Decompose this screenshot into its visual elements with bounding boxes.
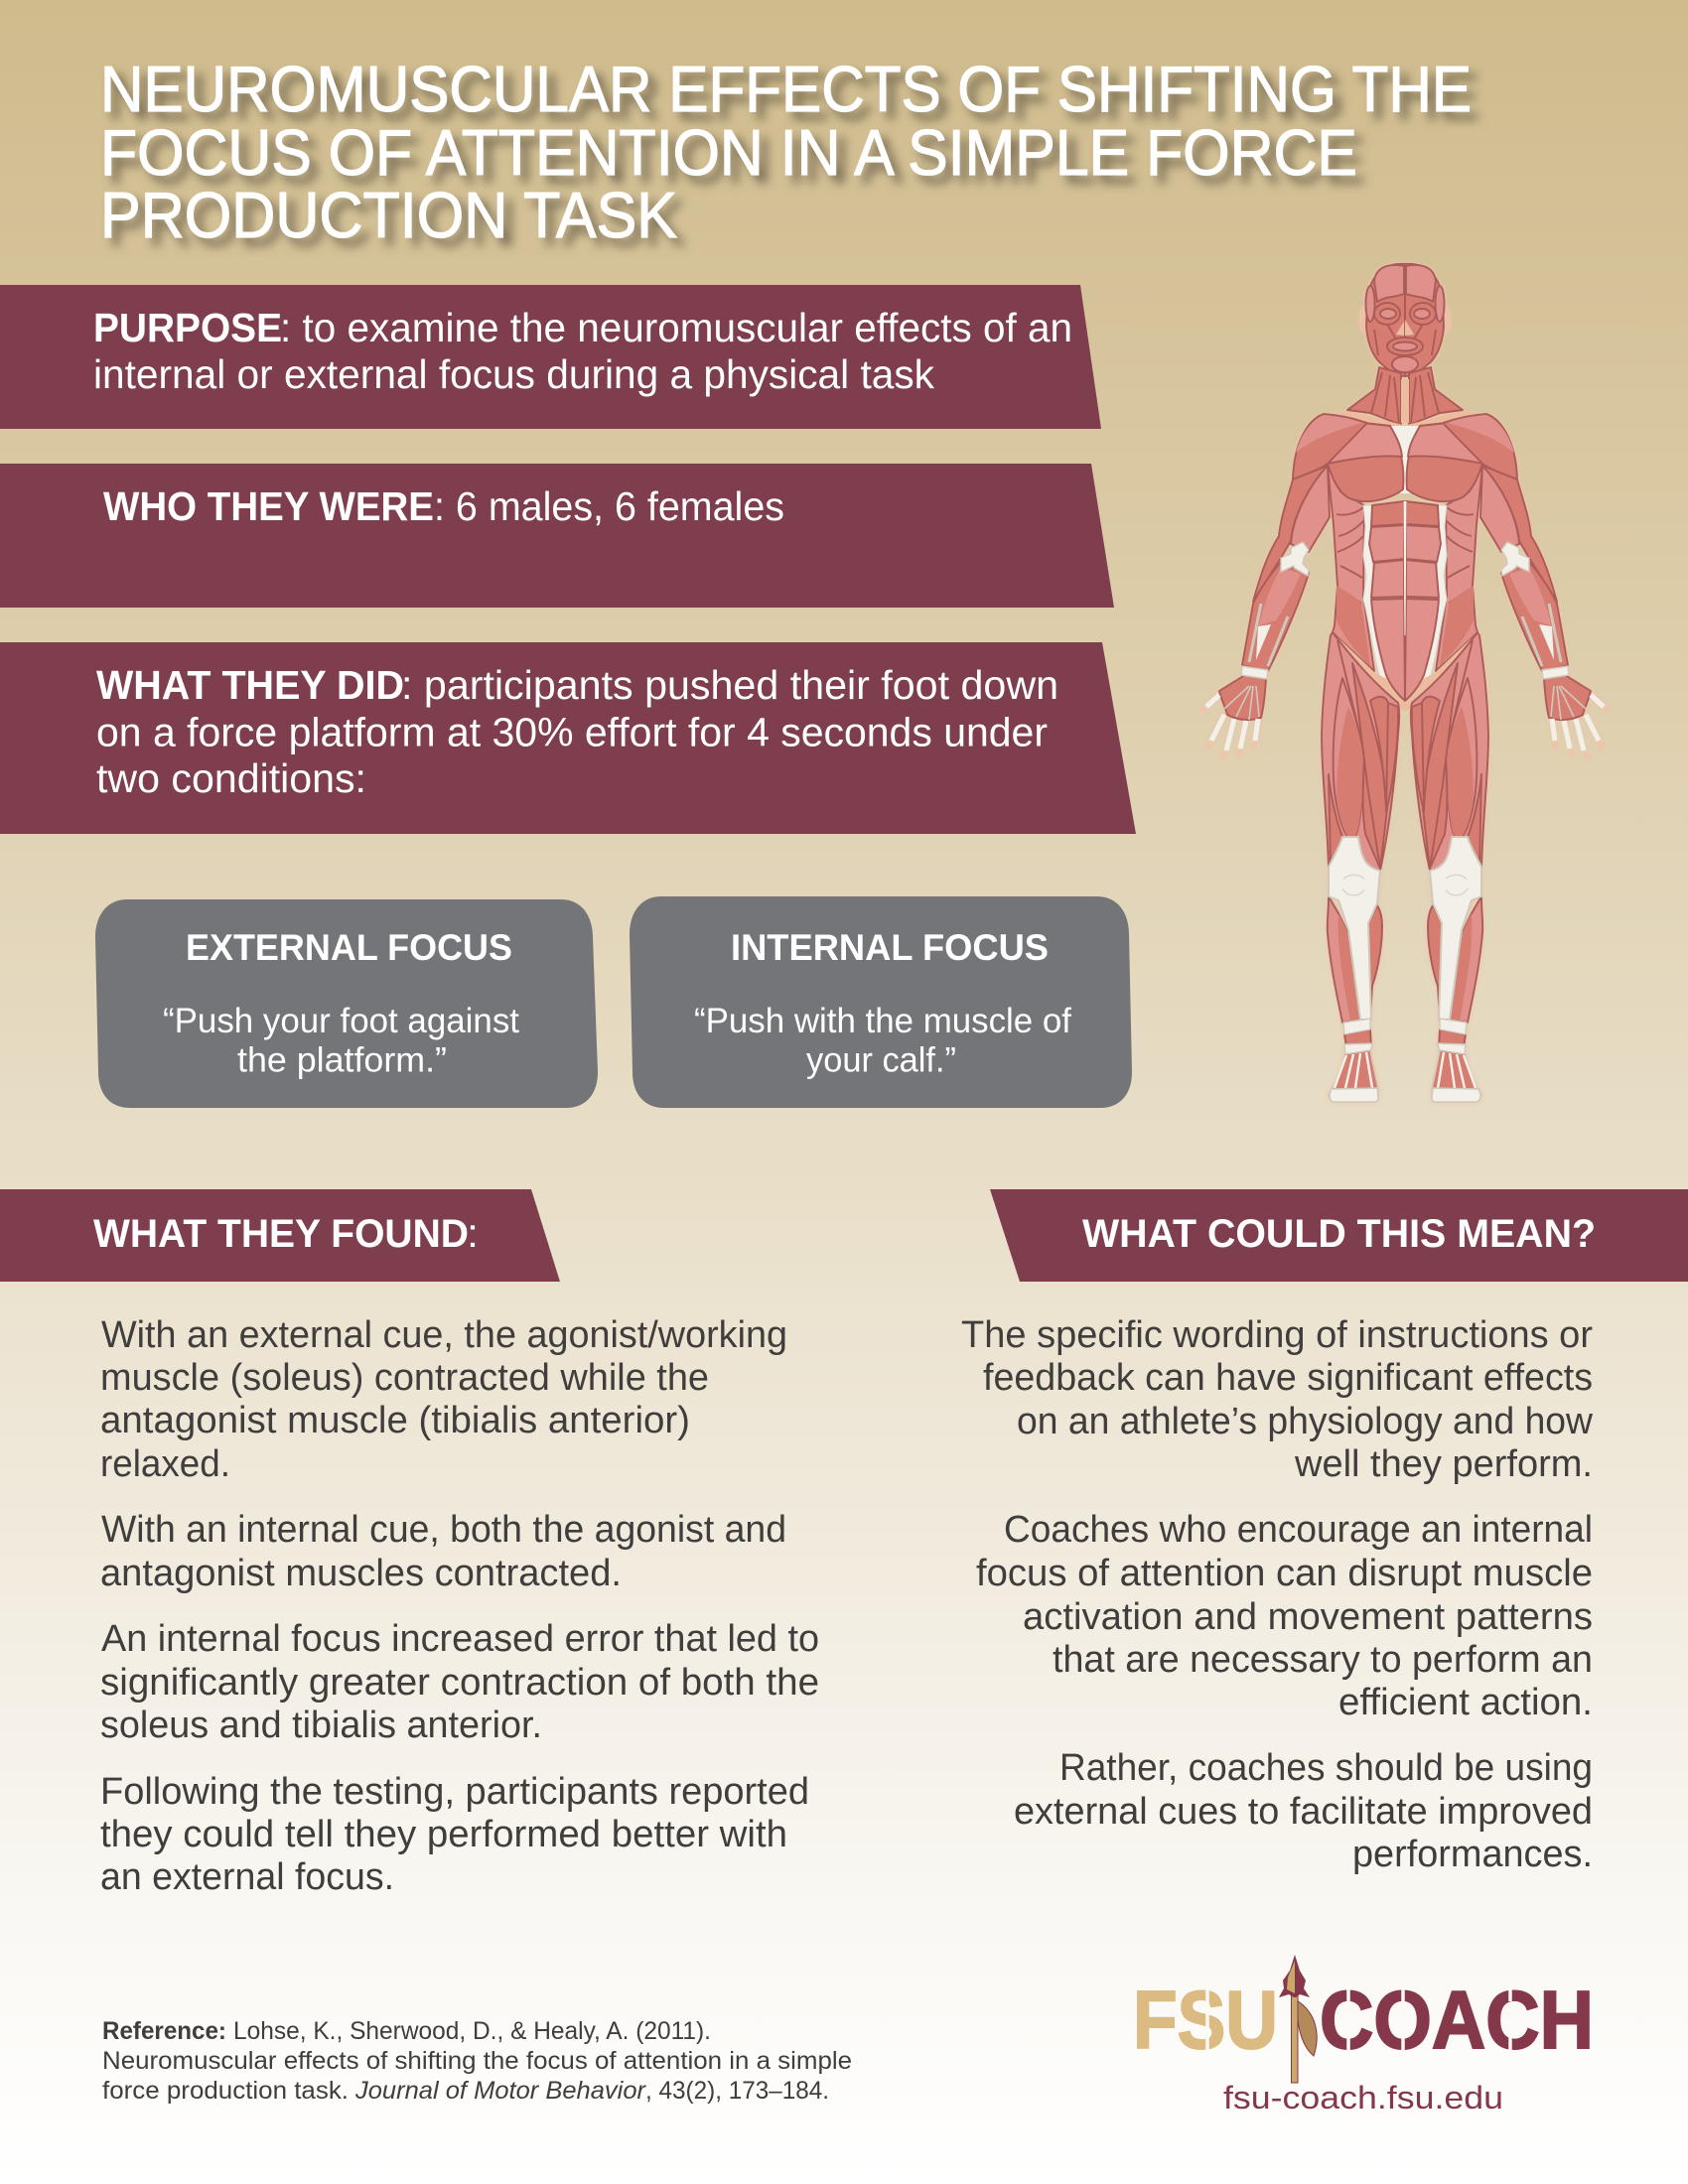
reference citation: Lohse, K., Sherwood, D., & Healy, A. (2011). <box>233 2017 711 2045</box>
text block: findings: an external focus. <box>100 1856 394 1898</box>
muscular body illustration <box>1202 264 1608 1102</box>
panel: purpose: PURPOSE <box>93 305 282 350</box>
text block: findings <box>100 1314 819 1898</box>
panel: who they were: : 6 males, 6 females <box>434 483 784 529</box>
title <box>100 53 1472 251</box>
panel: what they did: WHAT THEY DID <box>96 662 404 708</box>
icon: spear <box>1279 1955 1317 2083</box>
reference citation <box>102 2017 852 2105</box>
title: FOCUS OF ATTENTION IN A SIMPLE FORCE <box>100 116 1357 189</box>
text block: implications: Coaches who encourage an internal <box>1004 1509 1593 1551</box>
text block: findings: muscle (soleus) contracted while the <box>100 1357 709 1399</box>
text block: findings: soleus and tibialis anterior. <box>100 1705 542 1746</box>
panel: purpose: internal or external focus during a physical task <box>93 351 934 397</box>
heading: what they found: : <box>467 1210 479 1256</box>
panel: internal focus: “Push with the muscle of <box>694 1002 1071 1040</box>
reference citation: force production task. <box>102 2077 349 2105</box>
heading: what could this mean <box>990 1189 1688 1282</box>
panel: who they were: WHO THEY WERE <box>103 483 434 529</box>
panel: purpose <box>0 285 1101 429</box>
panel: internal focus <box>630 896 1132 1108</box>
panel: what they did <box>0 642 1136 834</box>
reference citation: Reference: <box>102 2017 226 2045</box>
text block: findings: antagonist muscles contracted. <box>100 1553 622 1594</box>
text block: findings: they could tell they performed better with <box>100 1814 787 1855</box>
panel: purpose: : to examine the neuromuscular effects of an <box>280 305 1072 350</box>
text block: implications: focus of attention can disrupt muscle <box>976 1553 1593 1594</box>
panel: external focus: “Push your foot against <box>163 1002 519 1040</box>
panel: external focus: the platform.” <box>237 1040 447 1080</box>
logo: FSU COACH: FSU <box>1133 1974 1278 2066</box>
text block: findings: With an external cue, the agonist/working <box>101 1314 787 1356</box>
text block: implications: activation and movement patterns <box>1023 1596 1593 1638</box>
panel: what they did: two conditions: <box>96 755 366 801</box>
panel: who they were <box>0 464 1114 608</box>
text block: implications: that are necessary to perform an <box>1053 1639 1593 1681</box>
title: PRODUCTION TASK <box>100 179 677 251</box>
reference citation: , 43(2), 173–184. <box>645 2077 829 2105</box>
heading: what they found <box>0 1189 560 1282</box>
heading: what could this mean: WHAT COULD THIS MEAN? <box>1082 1212 1596 1256</box>
panel: what they did: on a force platform at 30% effort for 4 seconds under <box>96 709 1048 754</box>
reference citation: Neuromuscular effects of shifting the focus of attention in a simple <box>102 2047 852 2075</box>
text block: findings: Following the testing, participants reported <box>100 1771 809 1813</box>
text block: findings: significantly greater contraction of both the <box>100 1662 819 1704</box>
text block: findings: relaxed. <box>100 1443 230 1485</box>
text block: implications <box>961 1314 1594 1875</box>
text block: findings: antagonist muscle (tibialis anterior) <box>100 1400 690 1441</box>
heading: what they found: WHAT THEY FOUND <box>93 1212 469 1256</box>
panel: external focus: EXTERNAL FOCUS <box>186 927 512 968</box>
text block: implications: feedback can have significant effects <box>983 1357 1593 1399</box>
title: NEUROMUSCULAR EFFECTS OF SHIFTING THE <box>100 53 1472 125</box>
panel: external focus <box>95 899 598 1108</box>
text block: implications: Rather, coaches should be using <box>1059 1747 1593 1789</box>
panel: internal focus: your calf.” <box>806 1040 956 1080</box>
reference citation: Journal of Motor Behavior <box>354 2077 647 2105</box>
text block: implications: The specific wording of instructions or <box>961 1314 1593 1356</box>
text block: implications: well they perform. <box>1294 1443 1593 1485</box>
text block: findings: An internal focus increased error that led to <box>101 1618 819 1660</box>
text block: implications: performances. <box>1352 1834 1593 1875</box>
panel: internal focus: INTERNAL FOCUS <box>731 927 1049 968</box>
website url: fsu-coach.fsu.edu <box>1223 2080 1503 2116</box>
text block: implications: on an athlete’s physiology and how <box>1017 1401 1594 1442</box>
text block: implications: external cues to facilitate improved <box>1014 1791 1593 1833</box>
logo: FSU COACH: COACH <box>1320 1974 1594 2066</box>
panel: what they did: : participants pushed their foot down <box>401 662 1058 708</box>
text block: implications: efficient action. <box>1338 1682 1593 1723</box>
text block: findings: With an internal cue, both the agonist and <box>101 1509 786 1551</box>
logo: FSU COACH <box>1133 1955 1594 2083</box>
